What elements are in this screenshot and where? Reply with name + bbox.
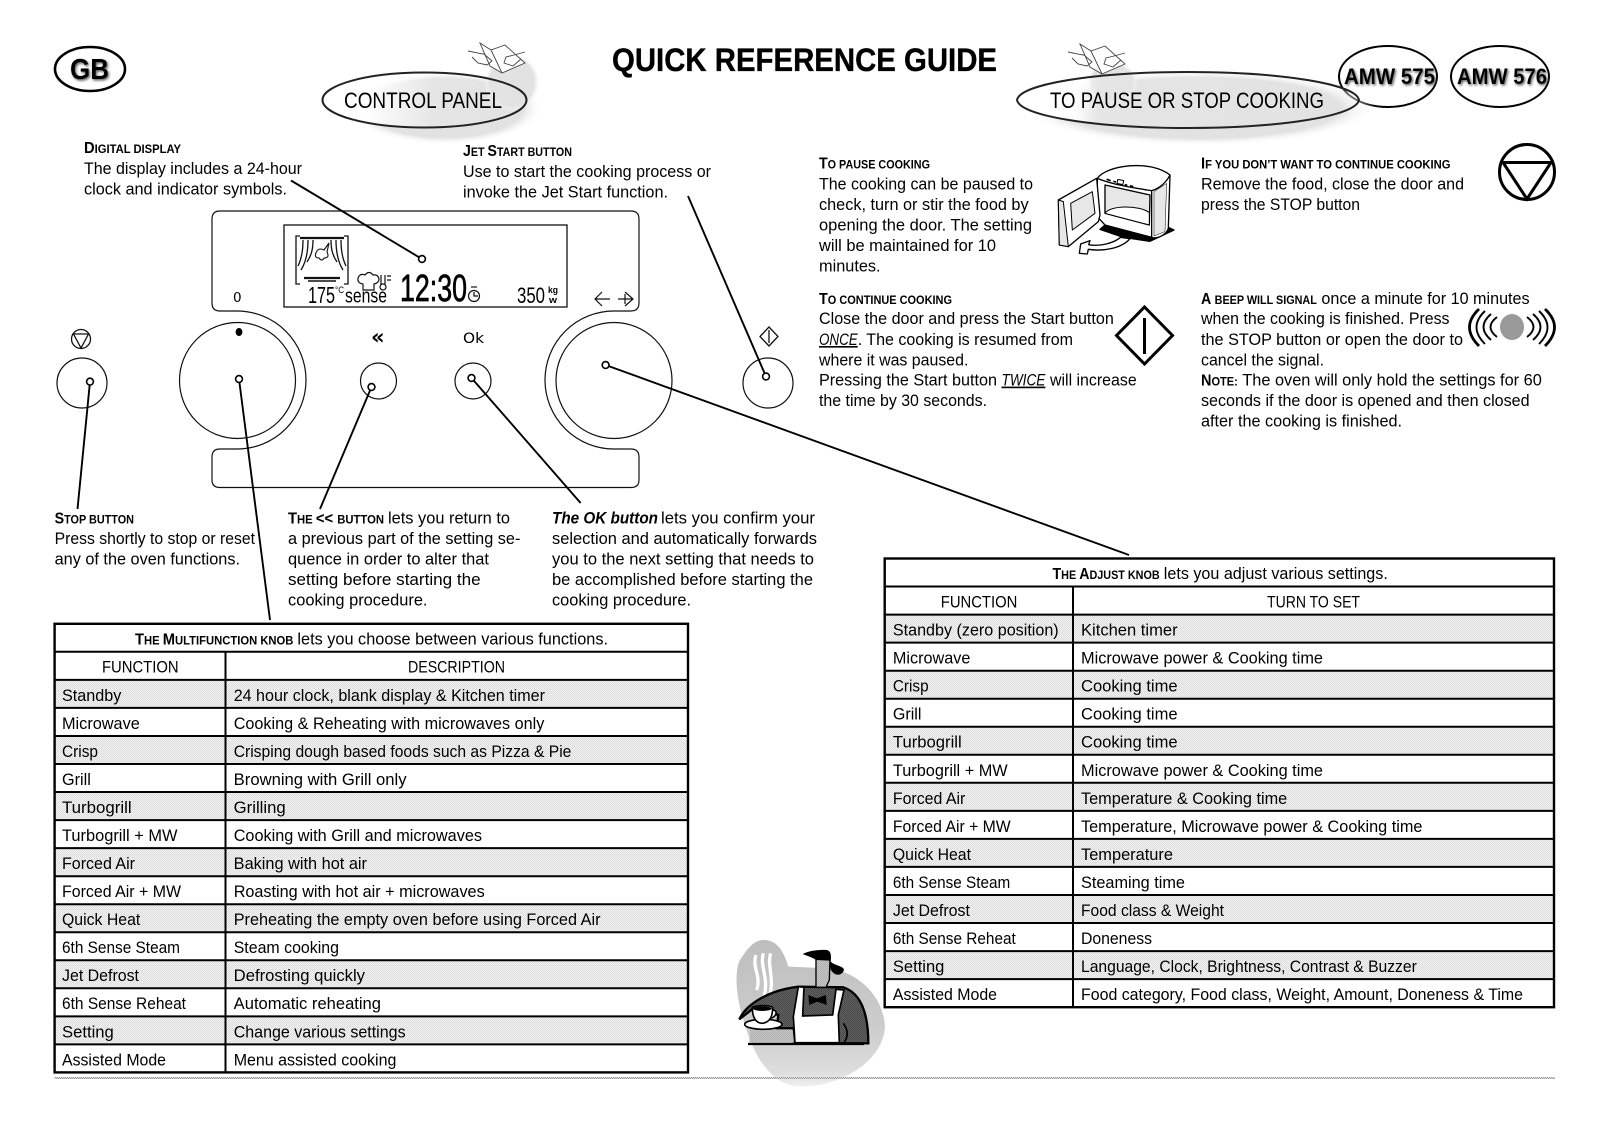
face xyxy=(816,958,830,987)
icon: chef hat and thermometer xyxy=(358,272,391,290)
row: crisp: Cooking time xyxy=(1081,678,1178,696)
row: assisted mode: Food category, Food class, Weight, Amount, Doneness & Time xyxy=(1081,986,1523,1004)
multifunction knob xyxy=(180,322,296,438)
icon: start diamond xyxy=(1116,307,1172,364)
row: 6th sense steam xyxy=(893,874,1185,892)
text block: to continue cooking: Close the door and press the Start button xyxy=(819,310,1114,328)
clock readout: 12:30 xyxy=(400,268,467,310)
table: multifunction knob xyxy=(55,624,688,1072)
weight and power readout: kg xyxy=(548,285,558,295)
text block: to continue cooking: TWICE xyxy=(1002,372,1046,390)
text block: to pause cooking: will be maintained for 10 xyxy=(818,237,996,255)
row: standby: 24 hour clock, blank display & Kitchen timer xyxy=(234,687,546,705)
icon: start symbol xyxy=(760,327,778,346)
text block: stop button xyxy=(55,510,255,568)
leader line: jet start xyxy=(688,196,769,380)
weight and power readout: w xyxy=(548,295,558,305)
text block: ok button: be accomplished before starting the xyxy=(552,571,813,589)
row: grill xyxy=(62,771,407,789)
row: setting: Setting xyxy=(893,958,944,976)
text block: beep signal and note xyxy=(1200,290,1542,431)
text block: back button: cooking procedure. xyxy=(288,592,428,610)
language badge: GB: GB xyxy=(70,54,109,86)
steam xyxy=(755,953,771,998)
leader line: ok button xyxy=(468,375,581,503)
text block: back button: THE << BUTTON xyxy=(288,510,384,528)
model badge: AMW 575 xyxy=(1339,46,1437,107)
row: jet defrost: Jet Defrost xyxy=(893,902,970,920)
table title: THE MULTIFUNCTION KNOB xyxy=(135,632,293,648)
text block: beep signal and note: cancel the signal. xyxy=(1201,351,1324,369)
row: forced air xyxy=(885,783,1554,811)
text block: to continue cooking: the time by 30 seconds. xyxy=(819,392,987,410)
text block: to continue cooking: ONCE xyxy=(819,331,859,349)
row: grill: Cooking time xyxy=(1081,706,1178,724)
row: quick heat: Preheating the empty oven before using Forced Air xyxy=(234,911,601,929)
text block: back button: a previous part of the setting se- xyxy=(288,530,520,548)
text block: ok button: lets you confirm your xyxy=(661,510,816,528)
row: forced air + mw xyxy=(893,818,1422,836)
stop button xyxy=(57,330,107,408)
model badge: AMW 575: AMW 575 xyxy=(1344,64,1435,89)
row: microwave: Microwave xyxy=(893,650,970,668)
text block: to continue cooking: Pressing the Start button xyxy=(819,372,997,390)
row: turbogrill: Turbogrill xyxy=(893,734,962,752)
text block: digital display xyxy=(84,140,303,198)
table header xyxy=(941,594,1360,612)
row: 6th sense reheat xyxy=(62,995,381,1013)
text block: beep signal and note: when the cooking is finished. Press xyxy=(1200,310,1450,328)
row: assisted mode: Assisted Mode xyxy=(893,986,997,1004)
text block: back button: setting before starting the xyxy=(288,571,481,589)
text block: back button: quence in order to alter that xyxy=(288,550,489,568)
text block: jet start button: invoke the Jet Start function. xyxy=(463,184,668,202)
text block: back button: lets you return to xyxy=(388,510,510,528)
cup xyxy=(752,1006,776,1023)
table title: THE ADJUST KNOB xyxy=(1052,566,1160,583)
row: 6th sense steam: Steaming time xyxy=(1081,874,1185,892)
row: turbogrill + mw: Microwave power & Cooking time xyxy=(1081,762,1323,780)
row: forced air + mw: Forced Air + MW xyxy=(62,883,182,901)
row: quick heat: Quick Heat xyxy=(893,846,971,864)
row: setting: Change various settings xyxy=(234,1023,406,1041)
apron xyxy=(793,987,844,1043)
text block: to continue cooking: where it was paused. xyxy=(818,351,968,369)
text block: beep signal and note: The oven will only hold the settings for 60 xyxy=(1242,372,1542,390)
text block: to pause cooking: The cooking can be paused to xyxy=(819,176,1033,194)
table title xyxy=(1052,565,1388,583)
row: setting xyxy=(885,951,1554,979)
row: assisted mode: Menu assisted cooking xyxy=(234,1051,396,1069)
text block: stop button: Press shortly to stop or reset xyxy=(55,530,255,548)
text block: digital display: clock and indicator symbols. xyxy=(84,180,287,198)
panel outline xyxy=(212,211,639,488)
text block: stop button: any of the oven functions. xyxy=(55,550,240,568)
model badge: AMW 576 xyxy=(1451,46,1549,107)
row: assisted mode xyxy=(893,986,1523,1004)
row: assisted mode: Assisted Mode xyxy=(62,1051,166,1069)
row: crisp: Crisp xyxy=(893,678,929,696)
text block: jet start button xyxy=(463,143,712,202)
text block: ok button: you to the next setting that needs to xyxy=(552,550,814,568)
section heading: control panel: CONTROL PANEL xyxy=(344,88,502,113)
text block: beep signal and note: once a minute for 10 minutes xyxy=(1321,290,1530,308)
section heading: to pause or stop cooking: TO PAUSE OR STOP COOKING xyxy=(1050,88,1324,113)
row: 6th sense reheat: Automatic reheating xyxy=(234,995,381,1013)
row: turbogrill + mw: Turbogrill + MW xyxy=(62,827,178,845)
row: 6th sense steam xyxy=(62,939,339,957)
icon: beep sound waves xyxy=(1470,309,1554,346)
temperature readout: °C xyxy=(335,285,344,295)
text block: to pause cooking: minutes. xyxy=(819,258,881,276)
row: 6th sense reheat xyxy=(893,930,1152,948)
row: crisp xyxy=(55,736,688,764)
back button xyxy=(360,325,396,399)
sleeve crease xyxy=(843,1023,847,1043)
table header: TURN TO SET xyxy=(1267,594,1360,612)
arm shadow xyxy=(749,1029,794,1043)
row: standby xyxy=(55,680,688,708)
row: 6th sense steam: 6th Sense Steam xyxy=(62,939,180,957)
text block: beep signal and note: A BEEP WILL SIGNAL xyxy=(1201,291,1317,308)
text block: if you don't want to continue: Remove the food, close the door and xyxy=(1201,176,1464,194)
row: microwave xyxy=(62,715,545,733)
row: forced air: Forced Air xyxy=(893,790,966,808)
table header: FUNCTION xyxy=(102,658,179,676)
row: microwave: Microwave power & Cooking time xyxy=(1081,650,1323,668)
title: QUICK REFERENCE GUIDE xyxy=(612,42,997,78)
row: standby xyxy=(885,615,1554,643)
row: jet defrost: Jet Defrost xyxy=(62,967,139,985)
text block: to pause cooking: opening the door. The setting xyxy=(819,216,1032,234)
table header: FUNCTION xyxy=(941,594,1017,612)
row: crisp xyxy=(885,671,1554,699)
table: adjust knob xyxy=(885,558,1554,1007)
text block: to pause cooking: check, turn or stir the food by xyxy=(819,196,1029,214)
leader line: back button xyxy=(320,384,375,509)
text block: ok button xyxy=(552,510,817,610)
text block: to pause cooking: TO PAUSE COOKING xyxy=(819,156,930,173)
section heading: control panel xyxy=(322,43,543,145)
row: 6th sense steam: Steam cooking xyxy=(234,939,339,957)
row: standby: Kitchen timer xyxy=(1081,622,1178,640)
adjust knob xyxy=(556,322,672,438)
shadow: pause heading xyxy=(1024,60,1376,146)
row: 6th sense steam: 6th Sense Steam xyxy=(893,874,1010,892)
icon: hands holding book xyxy=(468,43,525,73)
shadow: control panel heading xyxy=(347,52,543,145)
saucer xyxy=(745,1019,782,1029)
text block: digital display: The display includes a 24-hour xyxy=(84,160,303,178)
weight and power readout: 350 xyxy=(517,283,545,308)
ok button: Ok xyxy=(463,331,485,347)
row: jet defrost: Defrosting quickly xyxy=(234,967,366,985)
row: setting: Language, Clock, Brightness, Contrast & Buzzer xyxy=(1081,958,1417,976)
base line xyxy=(748,1040,864,1047)
text block: beep signal and note: the STOP button or open the door to xyxy=(1201,331,1463,349)
language badge: GB xyxy=(55,47,125,91)
row: quick heat xyxy=(55,904,688,932)
icon: timer xyxy=(468,287,480,302)
text block: ok button: selection and automatically forwards xyxy=(552,530,817,548)
row: turbogrill + mw xyxy=(62,827,482,845)
row: setting xyxy=(55,1016,688,1044)
row: grill: Browning with Grill only xyxy=(234,771,407,789)
text block: ok button: The OK button xyxy=(552,510,658,528)
control panel drawing xyxy=(57,211,793,488)
row: setting: Setting xyxy=(62,1023,114,1041)
row: crisp: Crisping dough based foods such as Pizza & Pie xyxy=(234,743,571,761)
row: jet defrost: Food class & Weight xyxy=(1081,902,1224,920)
row: turbogrill: Turbogrill xyxy=(62,799,132,817)
row: 6th sense reheat: 6th Sense Reheat xyxy=(62,995,186,1013)
text block: to pause cooking xyxy=(818,156,1033,276)
row: turbogrill: Grilling xyxy=(234,799,286,817)
text block: jet start button: Use to start the cooking process or xyxy=(463,163,712,181)
row: jet defrost xyxy=(885,895,1554,923)
row: microwave: Microwave xyxy=(62,715,140,733)
temperature readout: 175 xyxy=(308,282,335,308)
row: turbogrill xyxy=(885,727,1554,755)
row: crisp: Crisp xyxy=(62,743,98,761)
text block: if you don't want to continue: IF YOU DON’T WANT TO CONTINUE COOKING xyxy=(1201,156,1450,173)
text block: to continue cooking xyxy=(818,291,1137,410)
row: standby: Standby (zero position) xyxy=(893,622,1059,640)
row: forced air: Baking with hot air xyxy=(234,855,368,873)
row: 6th sense reheat: Doneness xyxy=(1081,930,1152,948)
zero position label: 0 xyxy=(233,290,242,306)
illustration: waiter with coffee cup xyxy=(737,940,885,1087)
row: forced air + mw: Roasting with hot air + microwaves xyxy=(234,883,485,901)
text block: to continue cooking: . The cooking is resumed from xyxy=(858,331,1073,349)
row: microwave xyxy=(893,650,1323,668)
text block: if you don't want to continue xyxy=(1201,156,1464,214)
row: standby: Standby xyxy=(62,687,122,705)
table header: DESCRIPTION xyxy=(408,658,505,676)
icon: oven cavity with curtains xyxy=(296,236,348,284)
background blob xyxy=(737,940,885,1087)
text block: to continue cooking: will increase xyxy=(1049,372,1137,390)
text block: beep signal and note: NOTE: xyxy=(1201,373,1238,390)
row: microwave: Cooking & Reheating with microwaves only xyxy=(234,715,545,733)
footer rule xyxy=(55,1077,1555,1079)
icon: stop symbol xyxy=(72,330,90,348)
table header xyxy=(102,658,505,676)
row: turbogrill + mw: Cooking with Grill and microwaves xyxy=(234,827,482,845)
text block: if you don't want to continue: press the STOP button xyxy=(1201,196,1360,214)
row: jet defrost xyxy=(55,960,688,988)
icon: large stop symbol xyxy=(1500,144,1554,200)
leader line: adjust knob xyxy=(602,362,1129,555)
text block: beep signal and note: seconds if the door is opened and then closed xyxy=(1201,392,1530,410)
row: turbogrill: Cooking time xyxy=(1081,734,1178,752)
row: forced air + mw: Temperature, Microwave power & Cooking time xyxy=(1081,818,1422,836)
table title xyxy=(55,624,688,652)
row: turbogrill + mw: Turbogrill + MW xyxy=(893,762,1008,780)
leader line: digital display xyxy=(291,180,425,262)
table title: lets you adjust various settings. xyxy=(1164,565,1388,583)
row: forced air: Forced Air xyxy=(62,855,136,873)
bow tie xyxy=(808,995,827,1005)
row: 6th sense reheat: 6th Sense Reheat xyxy=(893,930,1016,948)
text block: beep signal and note: after the cooking is finished. xyxy=(1201,413,1402,431)
icon: oven with open door xyxy=(1058,166,1174,254)
text block: jet start button: JET START BUTTON xyxy=(463,143,572,160)
row: grill xyxy=(893,706,1178,724)
digital display xyxy=(284,225,567,310)
row: quick heat: Quick Heat xyxy=(62,911,141,929)
text block: to continue cooking: TO CONTINUE COOKING xyxy=(819,291,952,308)
text block: digital display: DIGITAL DISPLAY xyxy=(84,140,181,157)
row: assisted mode xyxy=(62,1051,396,1069)
table title: lets you choose between various functions. xyxy=(297,630,608,648)
leader line: multifunction knob xyxy=(236,376,270,620)
text block: stop button: STOP BUTTON xyxy=(55,510,134,528)
coffee surface xyxy=(753,1006,772,1011)
row: quick heat: Temperature xyxy=(1081,846,1173,864)
row: quick heat xyxy=(885,839,1554,867)
hair xyxy=(803,950,844,975)
text block: ok button: cooking procedure. xyxy=(552,592,691,610)
row: forced air + mw xyxy=(62,883,485,901)
row: turbogrill + mw xyxy=(893,762,1323,780)
ok button xyxy=(455,331,491,399)
row: forced air: Temperature & Cooking time xyxy=(1081,790,1287,808)
icon: hands holding book xyxy=(1068,44,1125,74)
sense label: sense xyxy=(345,286,387,308)
row: forced air xyxy=(55,848,688,876)
model badge: AMW 576: AMW 576 xyxy=(1457,64,1547,89)
row: turbogrill xyxy=(55,792,688,820)
leader line: stop button xyxy=(78,378,93,509)
section heading: to pause or stop cooking xyxy=(1017,44,1376,146)
row: grill: Grill xyxy=(893,706,921,724)
text block: back button xyxy=(288,510,520,610)
row: forced air + mw: Forced Air + MW xyxy=(893,818,1011,836)
row: grill: Grill xyxy=(62,771,91,789)
torso and arms xyxy=(739,987,868,1043)
jet start button xyxy=(743,327,793,408)
back button: « xyxy=(371,325,385,349)
icon: adjust arrows xyxy=(595,292,633,306)
